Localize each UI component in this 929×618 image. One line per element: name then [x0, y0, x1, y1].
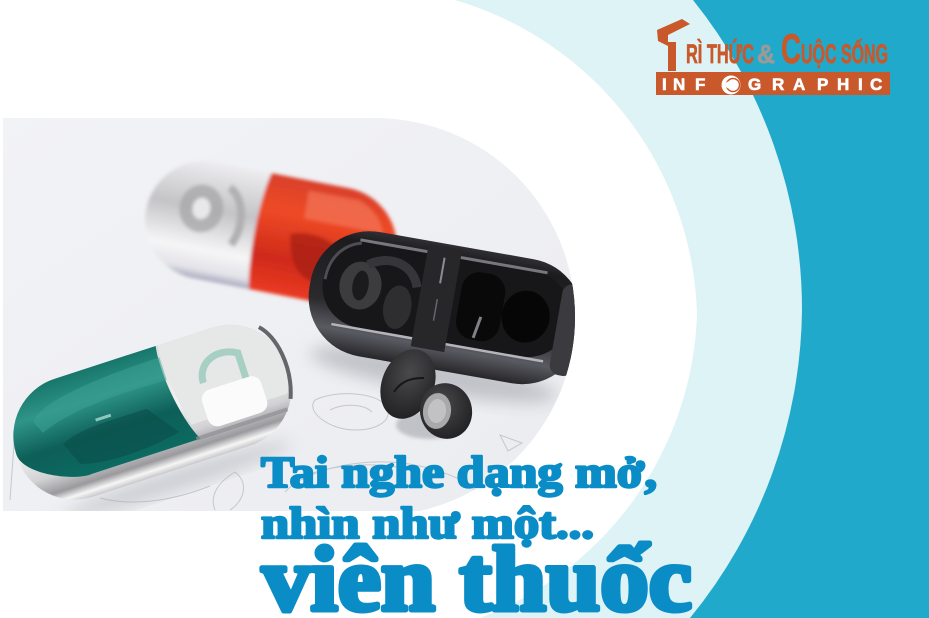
photo: pill-shaped earbuds on paper: [3, 118, 575, 511]
loose earbuds: [380, 349, 472, 440]
logo: Tri Thức & Cuộc Sống Infographic: [656, 19, 890, 95]
left bud in black pill: [340, 262, 382, 310]
title line 1: Tai nghe dạng mở,: [261, 448, 657, 497]
title line 2: nhìn như một...: [261, 499, 594, 548]
earbud: back: [380, 349, 436, 419]
logo text: Tri Thức: RÌ THỨC: [686, 38, 754, 69]
red and white pill: [144, 164, 399, 304]
paper sketches: [10, 394, 522, 510]
logo bar: [656, 72, 890, 95]
black pill: [308, 231, 575, 410]
background circle: white: [0, 0, 697, 618]
logo bar text: INF: [662, 75, 705, 94]
black pill centre band: [411, 244, 462, 352]
logo text: Cuộc: C: [781, 25, 801, 72]
green and silver pill: [13, 324, 293, 511]
title: [261, 448, 692, 618]
empty bud wells: [456, 272, 506, 341]
logo bar icon: [722, 76, 740, 94]
earbud: front with mesh: [420, 383, 472, 439]
logo roof T mark: [657, 19, 690, 71]
logo: Tri Thức & Cuộc Sống Infographic: GRAPHIC: [748, 75, 882, 94]
logo ampersand: &: [757, 39, 775, 69]
